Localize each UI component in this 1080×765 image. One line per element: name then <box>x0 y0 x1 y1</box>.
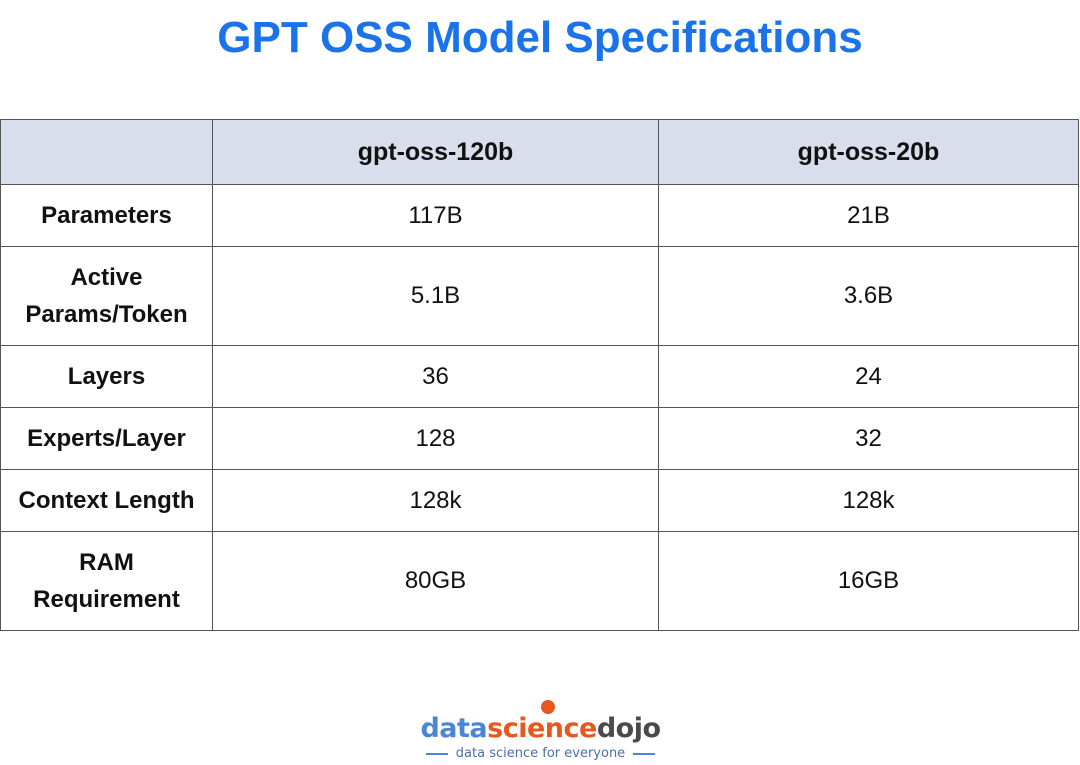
table: specifications: Active <box>70 264 143 291</box>
table: specifications: 80GB <box>405 567 466 594</box>
table: specifications: 117B <box>408 202 463 228</box>
table: specifications: Layers <box>68 362 145 390</box>
table: specifications: Parameters <box>41 202 172 228</box>
table: specifications: Context Length <box>18 486 194 514</box>
table: specifications: 36 <box>422 362 449 390</box>
table: specifications: 16GB <box>838 567 899 594</box>
title: GPT OSS Model Specifications <box>217 13 863 62</box>
table: specifications: 128k <box>842 486 895 514</box>
table: specifications: 3.6B <box>844 282 893 309</box>
table: specifications: Params/Token <box>25 301 188 328</box>
table: specifications <box>0 119 1079 631</box>
table: specifications: gpt-oss-120b <box>358 138 513 166</box>
table: specifications: Experts/Layer <box>27 424 186 452</box>
table: specifications: 128k <box>409 486 462 514</box>
logo: data science for everyone <box>456 746 625 761</box>
table: specifications: 21B <box>847 202 890 228</box>
table: specifications: 5.1B <box>411 282 460 309</box>
logo: datasciencedojo <box>420 713 661 744</box>
table: specifications: RAM <box>79 549 134 576</box>
table: specifications: 128 <box>415 424 456 452</box>
logo <box>420 700 661 761</box>
icon: logo dot <box>541 700 555 714</box>
table: specifications: 32 <box>855 424 882 452</box>
table: specifications: 24 <box>855 362 882 390</box>
table: specifications: gpt-oss-20b <box>798 138 939 166</box>
table: specifications: Requirement <box>33 586 180 613</box>
